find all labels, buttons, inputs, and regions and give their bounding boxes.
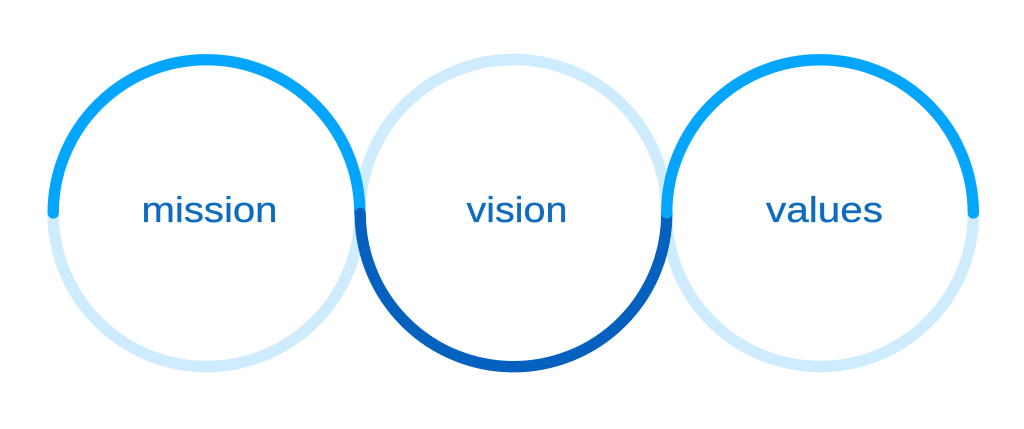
arc: values upper half: [667, 60, 973, 213]
label: values: values: [766, 189, 883, 230]
label: mission: mission: [142, 189, 278, 230]
ring track: values: [666, 60, 974, 366]
arc: mission upper half: [53, 60, 360, 213]
ring track: mission: [53, 60, 360, 366]
ring track: vision: [360, 60, 667, 366]
arc: vision lower half: [360, 214, 667, 367]
label: vision: vision: [466, 189, 568, 230]
